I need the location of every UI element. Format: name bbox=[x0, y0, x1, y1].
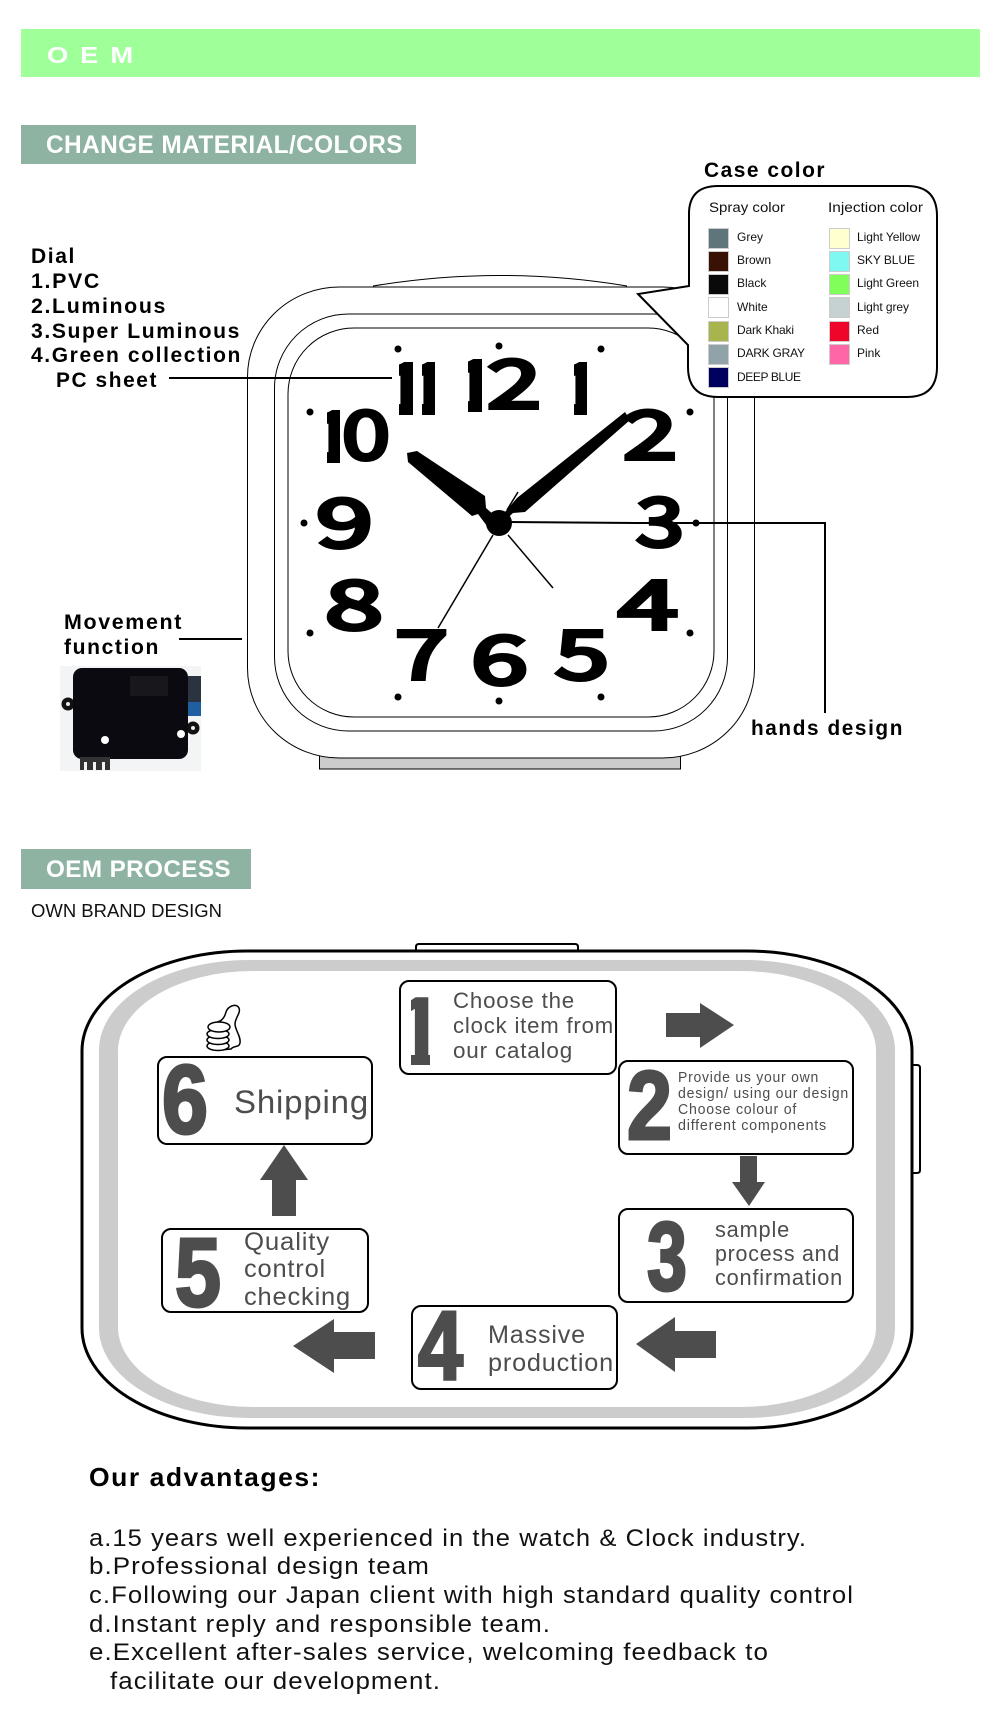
text block: movement function: Movement bbox=[64, 611, 183, 634]
dial numerals: 3 bbox=[636, 469, 684, 566]
spray color swatches: Brown bbox=[737, 253, 771, 267]
clock body outlines bbox=[248, 287, 754, 758]
clock top button bbox=[373, 276, 627, 286]
dial numerals: 1 bbox=[454, 331, 495, 432]
dial numerals: 1 bbox=[385, 334, 426, 435]
text block: dial options: 1.PVC bbox=[31, 270, 101, 293]
step 6: 6 bbox=[162, 1045, 208, 1154]
step 5: checking bbox=[244, 1283, 351, 1311]
heading: change material/colors: CHANGE MATERIAL/COLORS bbox=[46, 131, 403, 159]
text block: dial options bbox=[31, 245, 242, 392]
callout: case color: Injection color bbox=[828, 199, 923, 215]
heading: OEM process: OEM PROCESS bbox=[46, 856, 231, 883]
dial numerals: 4 bbox=[618, 552, 678, 649]
step 3: 3 bbox=[647, 1202, 687, 1311]
arrow: step 4 to 5 bbox=[293, 1319, 375, 1373]
callout: case color: Spray color bbox=[709, 199, 785, 215]
title banner: OEM: OEM bbox=[47, 42, 145, 68]
dial numerals bbox=[317, 358, 682, 687]
spray color swatches: Grey bbox=[737, 230, 763, 244]
title banner: OEM bbox=[21, 29, 980, 77]
step 5 bbox=[162, 1218, 368, 1327]
spray color swatches: Black bbox=[737, 276, 767, 290]
dial numerals: 5 bbox=[555, 602, 609, 699]
arrow: step 5 to 6 bbox=[260, 1145, 308, 1216]
step 4 bbox=[412, 1291, 617, 1400]
text block: movement function bbox=[64, 611, 183, 659]
heading: OEM process bbox=[21, 849, 251, 889]
step 1: Choose the bbox=[453, 988, 575, 1013]
injection color swatches: Pink bbox=[857, 346, 881, 360]
text block: our advantages: a.15 years well experienced in the watch & Clock industry. bbox=[89, 1525, 807, 1552]
step 5: control bbox=[244, 1255, 326, 1283]
spray color swatches: White bbox=[737, 300, 768, 314]
text block: movement function: function bbox=[64, 636, 160, 659]
photo: clock movement bbox=[60, 666, 201, 771]
injection color swatches: Light Yellow bbox=[857, 230, 920, 244]
step 4: 4 bbox=[418, 1291, 463, 1400]
panel: process flow bbox=[82, 944, 920, 1428]
step 1: our catalog bbox=[453, 1038, 573, 1063]
step 3: confirmation bbox=[715, 1265, 843, 1290]
text block: our advantages: e.Excellent after-sales service, welcoming feedback to bbox=[89, 1639, 769, 1666]
step 2: Provide us your own bbox=[678, 1069, 819, 1086]
step 3: process and bbox=[715, 1241, 840, 1266]
dial numerals: 6 bbox=[471, 607, 528, 704]
step 2: Choose colour of bbox=[678, 1101, 797, 1118]
step 2: different components bbox=[678, 1117, 827, 1134]
clock outline buttons bbox=[416, 944, 578, 950]
dial numerals: 7 bbox=[395, 602, 448, 699]
arrow: step 1 to 2 bbox=[666, 1003, 734, 1048]
dial numerals: 1 bbox=[313, 382, 354, 483]
clock hands bbox=[407, 412, 630, 628]
arrow: step 3 to 4 bbox=[636, 1317, 716, 1372]
step 1: 1 bbox=[392, 976, 447, 1086]
label: hands design: hands design bbox=[751, 717, 904, 740]
step 4: production bbox=[488, 1349, 614, 1377]
panel: clock diagram bbox=[248, 276, 825, 769]
icon: thumbs up bbox=[207, 1005, 240, 1050]
text block: dial options: Dial bbox=[31, 245, 76, 268]
injection color swatches bbox=[830, 228, 920, 364]
dial numerals: 2 bbox=[487, 331, 541, 428]
arrow: step 2 to 3 bbox=[732, 1156, 765, 1206]
text block: our advantages bbox=[89, 1462, 854, 1695]
step 2: design/ using our design bbox=[678, 1085, 849, 1102]
clock outline bbox=[82, 951, 912, 1428]
text block: our advantages: b.Professional design team bbox=[89, 1553, 430, 1580]
heading: change material/colors bbox=[21, 125, 416, 164]
spray color swatches: DARK GRAY bbox=[737, 346, 805, 360]
spray color swatches bbox=[708, 228, 805, 388]
dial numerals: 9 bbox=[316, 470, 373, 567]
spray color swatches: DEEP BLUE bbox=[737, 370, 801, 384]
text block: dial options: 2.Luminous bbox=[31, 295, 167, 318]
step 2 bbox=[619, 1051, 853, 1160]
clock base bbox=[320, 750, 680, 769]
step 3 bbox=[619, 1202, 853, 1311]
step 4: Massive bbox=[488, 1321, 586, 1349]
text block: our advantages: c.Following our Japan client with high standard quality control bbox=[89, 1582, 854, 1609]
step 1 bbox=[399, 980, 617, 1075]
subheading: own brand design: OWN BRAND DESIGN bbox=[31, 901, 222, 921]
step 6: Shipping bbox=[234, 1084, 369, 1120]
injection color swatches: Light Green bbox=[857, 276, 919, 290]
leader: dial bbox=[169, 377, 392, 379]
text block: dial options: PC sheet bbox=[56, 369, 158, 392]
injection color swatches: Red bbox=[857, 323, 879, 337]
dial numerals: 8 bbox=[325, 552, 383, 649]
dial numerals: 1 bbox=[560, 334, 601, 435]
step 6 bbox=[158, 1045, 372, 1154]
step 1: clock item from bbox=[453, 1013, 614, 1038]
text block: dial options: 4.Green collection bbox=[31, 344, 242, 367]
text block: our advantages: Our advantages: bbox=[89, 1462, 321, 1492]
spray color swatches: Dark Khaki bbox=[737, 323, 794, 337]
injection color swatches: SKY BLUE bbox=[857, 253, 915, 267]
leader: movement bbox=[179, 638, 242, 640]
text block: our advantages: d.Instant reply and responsible team. bbox=[89, 1611, 551, 1638]
dial numerals: 1 bbox=[408, 334, 449, 435]
step 2: 2 bbox=[627, 1051, 672, 1160]
text block: our advantages: facilitate our development. bbox=[110, 1668, 441, 1695]
leader: hands design bbox=[505, 522, 825, 713]
step 3: sample bbox=[715, 1217, 790, 1242]
step 5: 5 bbox=[175, 1218, 221, 1327]
step 5: Quality bbox=[244, 1228, 330, 1256]
text block: dial options: 3.Super Luminous bbox=[31, 320, 241, 343]
dial numerals: 0 bbox=[342, 382, 390, 479]
callout: case color bbox=[638, 159, 937, 397]
injection color swatches: Light grey bbox=[857, 300, 909, 314]
minute dots bbox=[300, 342, 700, 704]
dial numerals: 2 bbox=[623, 382, 677, 479]
callout: case color: Case color bbox=[704, 159, 826, 182]
